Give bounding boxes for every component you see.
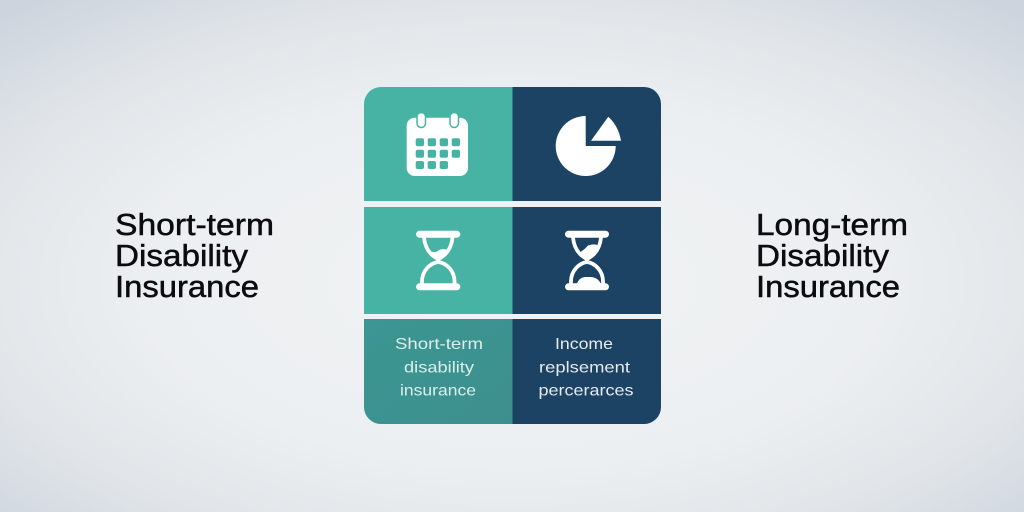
text: income replacement label — [538, 336, 634, 400]
text: short-term disability insurance label: disability — [404, 360, 474, 376]
text: short-term disability insurance label: insurance — [400, 382, 476, 400]
heading: short-term disability insurance: Disability — [115, 238, 249, 273]
icon: calendar — [407, 112, 468, 176]
panel: short-term label cell — [364, 319, 512, 424]
panel: comparison grid — [364, 87, 661, 424]
text: short-term disability insurance label: Short-term — [395, 336, 483, 353]
panel: short-term hourglass cell — [364, 207, 512, 314]
heading: long-term disability insurance: Long-term — [756, 207, 908, 242]
panel: long-term hourglass cell — [512, 207, 661, 314]
panel: income replacement label cell — [512, 319, 661, 424]
panel: pie chart cell — [512, 87, 661, 201]
icon: hourglass long-term — [565, 231, 609, 290]
panel: calendar cell — [364, 87, 512, 201]
heading: short-term disability insurance: Insurance — [115, 269, 259, 304]
heading: long-term disability insurance — [756, 207, 908, 304]
heading: short-term disability insurance — [115, 207, 274, 304]
icon: hourglass short-term — [416, 231, 460, 290]
text: income replacement label: percerarces — [538, 382, 634, 400]
text: short-term disability insurance label — [395, 336, 483, 400]
text: income replacement label: Income — [555, 336, 613, 353]
heading: short-term disability insurance: Short-term — [115, 207, 274, 242]
text: income replacement label: replsement — [539, 360, 631, 376]
heading: long-term disability insurance: Insurance — [756, 269, 900, 304]
icon: pie chart — [556, 116, 621, 176]
heading: long-term disability insurance: Disability — [756, 238, 890, 273]
